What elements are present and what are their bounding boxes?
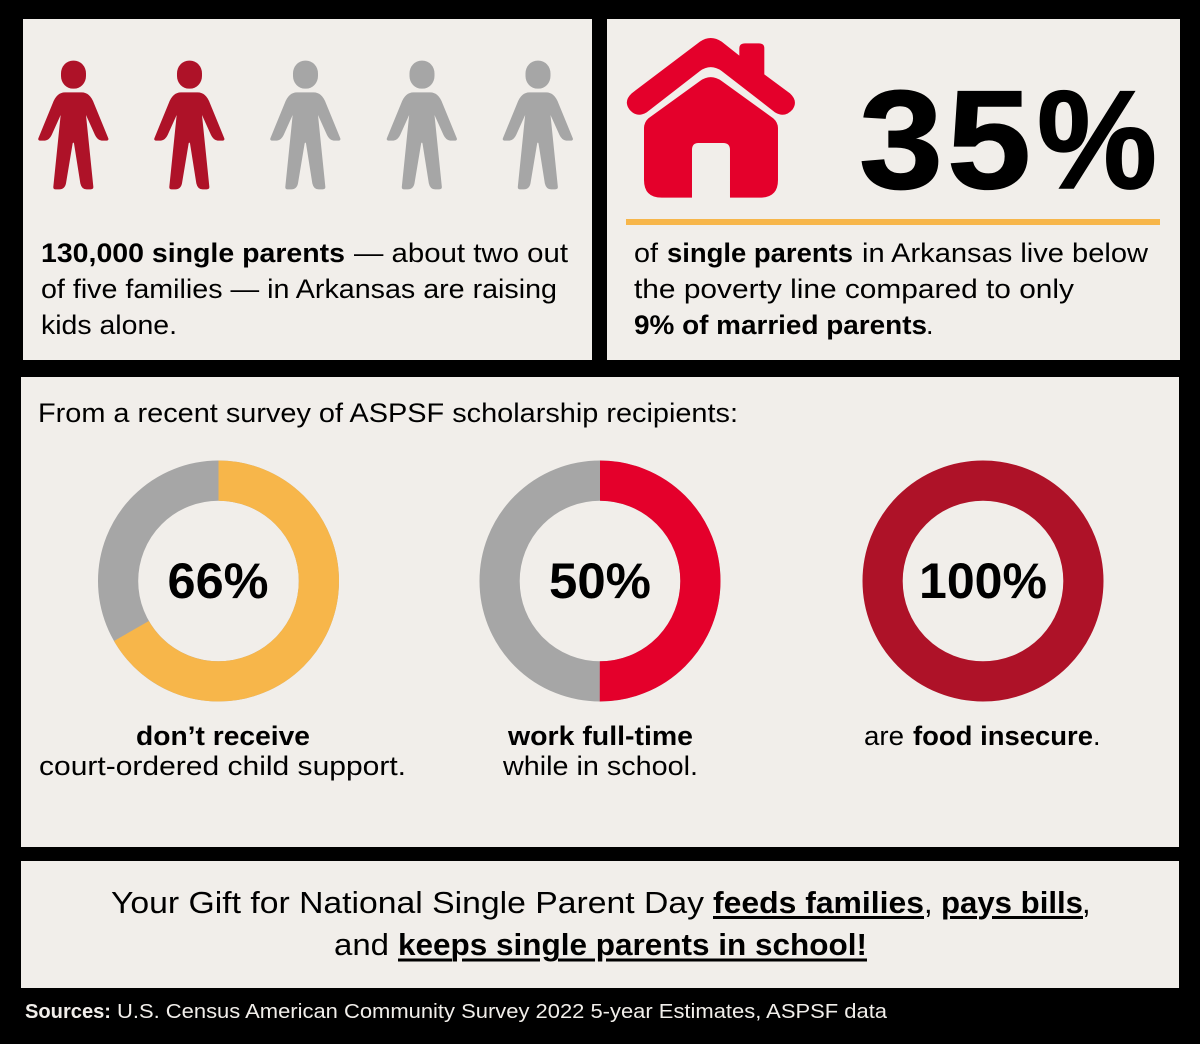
panel: poverty statistic: [607, 19, 1180, 360]
text: poverty statement: of: [634, 238, 659, 268]
text: single parents statement: [41, 238, 569, 340]
donut chart: 100%: [883, 481, 1083, 681]
text: call to action: pays bills: [941, 885, 1083, 920]
text: single parents statement: — about two out: [354, 238, 569, 268]
big number: 35%: 3: [859, 61, 943, 218]
text: call to action: and: [334, 927, 389, 962]
text: poverty statement: single parents: [667, 238, 853, 268]
text: call to action: keeps single parents in school!: [398, 927, 867, 962]
donut chart: 50%: [500, 481, 700, 681]
caption: 50%: while in school.: [502, 751, 698, 781]
caption: 100%: food insecure: [913, 721, 1093, 751]
text: single parents statement: kids alone.: [41, 310, 177, 340]
text: call to action: ,: [924, 885, 933, 920]
caption: 100%: .: [1093, 721, 1101, 751]
icon: person 5: [503, 61, 573, 189]
sources line: U.S. Census American Community Survey 2022 5-year Estimates, ASPSF data: [117, 1001, 888, 1023]
text: poverty statement: 9% of married parents: [634, 310, 927, 340]
sources line: Sources:: [25, 1001, 111, 1023]
panel: survey results: [21, 377, 1179, 847]
text: single parents statement: 130,000 single parents: [41, 238, 345, 268]
icon: person 1 (highlighted): [38, 61, 108, 189]
panel: two out of five families: [23, 19, 592, 360]
caption: 100%: are: [864, 721, 904, 751]
icon: person 3: [270, 61, 340, 189]
text: poverty statement: .: [926, 310, 934, 340]
icon: house: [627, 38, 795, 198]
text: call to action: feeds families: [713, 885, 924, 920]
big number: 35%: %: [1037, 61, 1157, 218]
icon: person 4: [387, 61, 457, 189]
text: call to action: ,: [1082, 885, 1091, 920]
text: poverty statement: the poverty line compared to only: [634, 274, 1075, 304]
text: poverty statement: [634, 238, 1149, 340]
divider rule: [626, 219, 1160, 225]
donut chart: 50%: 50%: [549, 553, 651, 609]
text: call to action: Your Gift for National Single Parent Day: [111, 885, 705, 920]
donut chart: 66%: [118, 481, 319, 681]
big number: 35%: 5: [947, 61, 1031, 218]
caption: 66%: don’t receive: [136, 721, 310, 751]
caption: 50%: work full-time: [507, 721, 693, 751]
text: poverty statement: in Arkansas live below: [862, 238, 1149, 268]
caption: 66%: [39, 721, 406, 781]
icon: person 2 (highlighted): [154, 61, 224, 189]
caption: 50%: [502, 721, 698, 781]
panel: call to action: [21, 861, 1179, 988]
heading: survey: From a recent survey of ASPSF scholarship recipients:: [38, 398, 738, 428]
donut chart: 100%: 100%: [919, 553, 1047, 609]
text: call to action: [111, 885, 1091, 962]
caption: 66%: court-ordered child support.: [39, 751, 406, 781]
donut chart: 66%: 66%: [168, 553, 268, 609]
text: single parents statement: of five families — in Arkansas are raising: [41, 274, 557, 304]
